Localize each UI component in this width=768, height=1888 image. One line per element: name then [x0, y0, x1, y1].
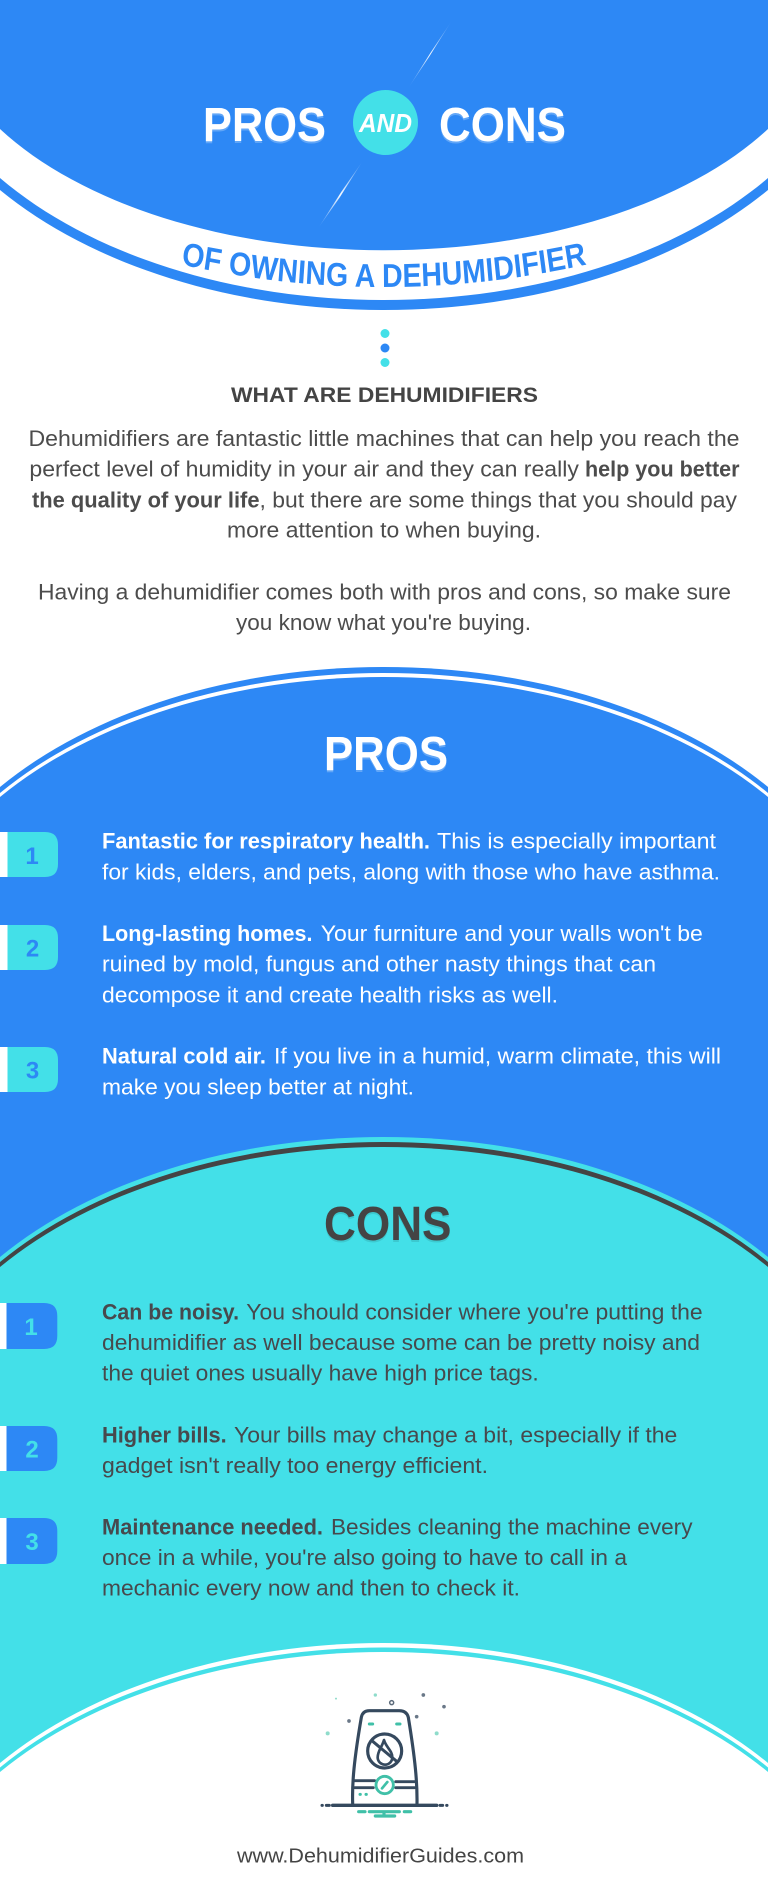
con item 1 — [0, 1299, 703, 1386]
pro item 2: Long-lasting homes. — [102, 921, 312, 946]
badge 3: 3 — [26, 1058, 39, 1084]
title: pros and cons: PROS — [203, 99, 326, 152]
con item 1: dehumidifier as well because some can be pretty noisy and — [102, 1330, 700, 1355]
heading: pros: PROS — [324, 728, 448, 781]
badge 1: 1 — [24, 1314, 38, 1341]
badge 3: 3 — [25, 1529, 39, 1556]
intro text: Having a dehumidifier comes both with pros and cons, so make sure — [38, 579, 731, 604]
con item 3 — [0, 1514, 692, 1601]
con item 2: gadget isn't really too energy efficient. — [102, 1453, 488, 1478]
icon: dehumidifier — [322, 1693, 447, 1816]
intro text: more attention to when buying. — [227, 518, 541, 543]
subtitle: curved: OF OWNING A DEHUMIDIFIER — [184, 244, 586, 287]
pro item 1: for kids, elders, and pets, along with those who have asthma. — [102, 859, 720, 884]
con item 3: Besides cleaning the machine every — [331, 1514, 692, 1539]
pro item 3: If you live in a humid, warm climate, this will — [274, 1043, 721, 1068]
intro text: the quality of your life — [32, 487, 260, 512]
intro text: Dehumidifiers are fantastic little machines that can help you reach the — [28, 426, 740, 451]
pro item 3: Natural cold air. — [102, 1043, 266, 1068]
intro text: , but there are some things that you should pay — [260, 487, 737, 512]
panel: header banner — [0, 0, 768, 310]
pro item 1: Fantastic for respiratory health. — [102, 828, 430, 853]
pro item 2: decompose it and create health risks as well. — [102, 982, 558, 1007]
con item 3: mechanic every now and then to check it. — [102, 1576, 520, 1601]
heading: what are dehumidifiers: WHAT ARE DEHUMIDIFIERS — [231, 383, 538, 407]
intro text: you know what you're buying. — [236, 610, 531, 635]
badge 2 — [0, 925, 58, 970]
pro item 2: Your furniture and your walls won't be — [321, 921, 703, 946]
pro item 2: ruined by mold, fungus and other nasty things that can — [102, 952, 656, 977]
website url: www.DehumidifierGuides.com — [236, 1846, 524, 1868]
con item 1: the quiet ones usually have high price tags. — [102, 1361, 539, 1386]
con item 1: You should consider where you're putting the — [246, 1299, 703, 1324]
intro text — [28, 426, 740, 635]
pro item 3: make you sleep better at night. — [102, 1074, 414, 1099]
badge 1 — [0, 832, 58, 877]
dots divider — [380, 329, 390, 367]
badge 3 — [0, 1518, 57, 1564]
con item 3: Maintenance needed. — [102, 1514, 323, 1539]
con item 2: Your bills may change a bit, especially if the — [234, 1422, 677, 1447]
pro item 3 — [0, 1043, 721, 1099]
pro item 1: This is especially important — [437, 828, 716, 853]
badge 2: 2 — [26, 936, 39, 962]
badge 2 — [0, 1426, 57, 1471]
panel: cons — [0, 1137, 768, 1800]
badge 1 — [0, 1303, 57, 1349]
badge 2: 2 — [25, 1436, 39, 1464]
heading: cons: CONS — [324, 1198, 452, 1251]
title: pros and cons — [203, 90, 566, 155]
panel: footer — [0, 1643, 768, 1888]
con item 3: once in a while, you're also going to have to call in a — [102, 1545, 628, 1570]
intro text: help you better — [585, 457, 740, 482]
title: pros and cons: AND — [358, 108, 412, 138]
pro item 1 — [0, 828, 720, 884]
title: pros and cons: CONS — [439, 99, 566, 152]
panel: pros — [0, 667, 768, 1450]
badge 3 — [0, 1047, 58, 1092]
con item 1: Can be noisy. — [102, 1299, 239, 1324]
con item 2: Higher bills. — [102, 1422, 227, 1447]
pro item 2 — [0, 921, 703, 1007]
badge 1: 1 — [25, 843, 39, 870]
con item 2 — [0, 1422, 677, 1478]
intro text: perfect level of humidity in your air and they can really — [29, 457, 579, 482]
